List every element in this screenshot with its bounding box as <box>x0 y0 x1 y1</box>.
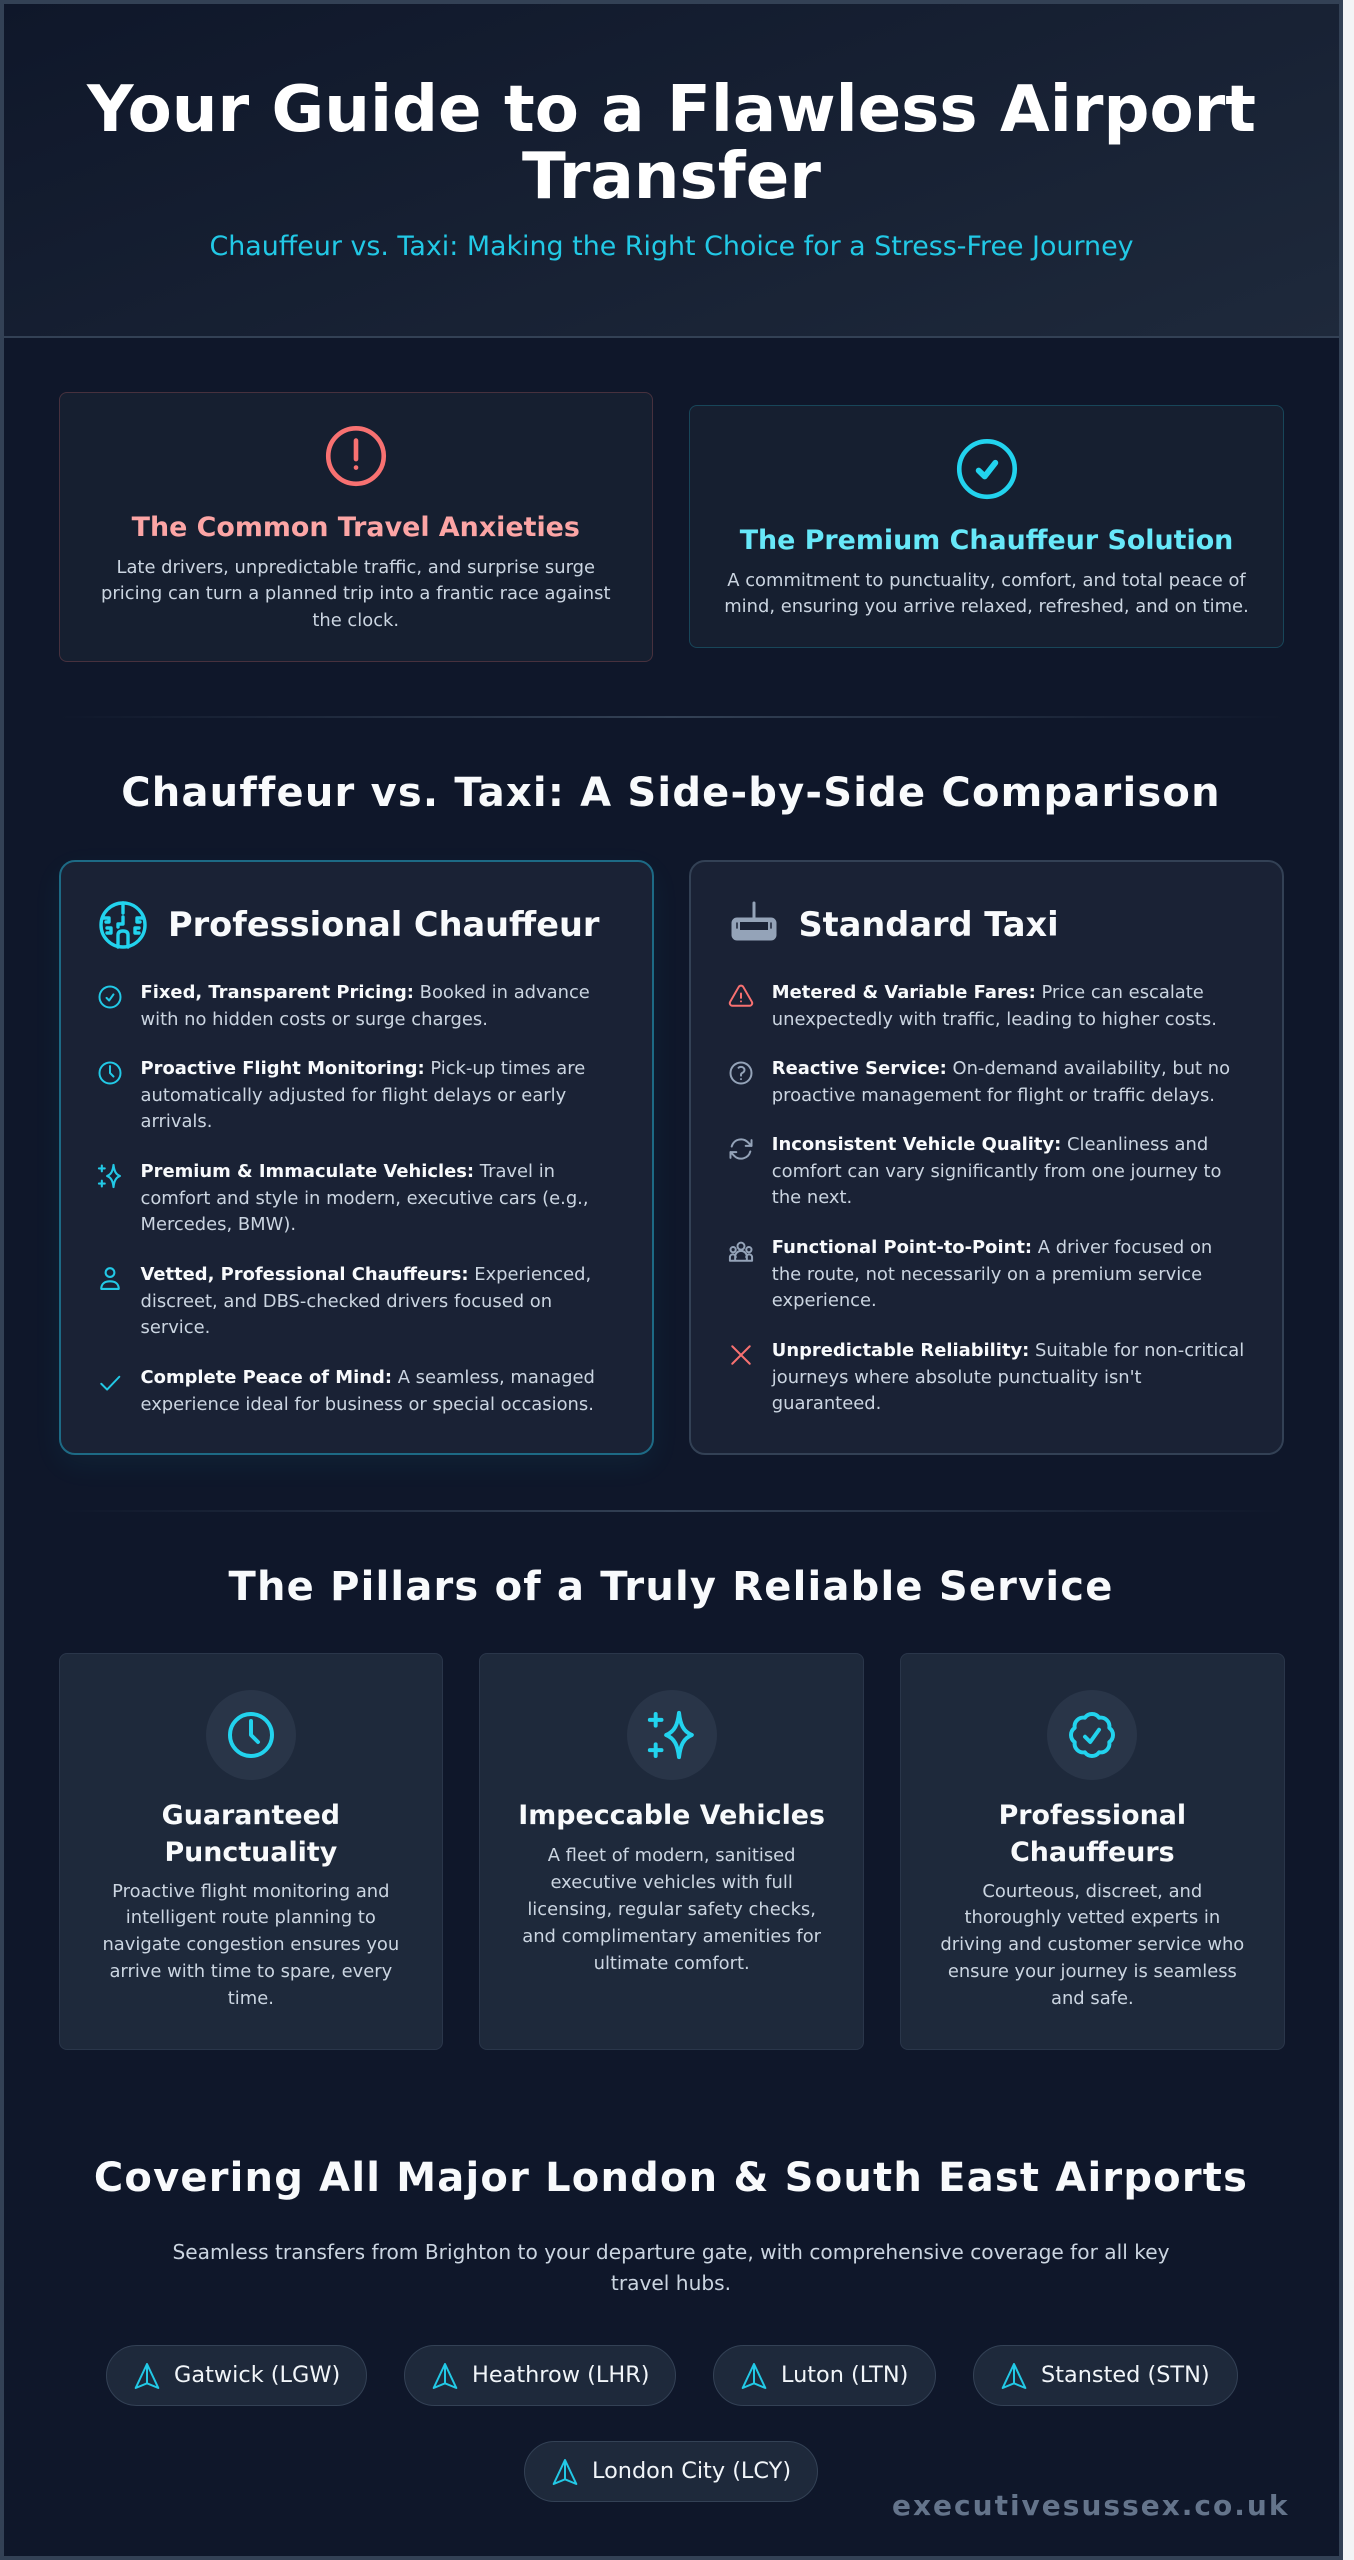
icon: refresh arrows <box>730 1138 752 1160</box>
text <box>140 982 590 1030</box>
list item: fares <box>728 982 1217 1030</box>
text <box>140 1367 595 1415</box>
pill: Stansted <box>973 2345 1238 2406</box>
panel: premium chauffeur solution <box>689 405 1284 648</box>
list item: reactive service <box>730 1058 1230 1106</box>
heading <box>162 1800 340 1868</box>
text: the clock. <box>312 610 399 631</box>
heading: Guaranteed <box>162 1800 340 1831</box>
text: Mercedes, BMW). <box>140 1214 296 1235</box>
panel: standard taxi <box>689 860 1284 1455</box>
section heading: airports: Covering All Major London & South East Airports <box>94 2155 1248 2201</box>
text: and complimentary amenities for <box>522 1926 821 1947</box>
text <box>102 1880 399 2009</box>
list item: flight monitoring <box>98 1058 585 1132</box>
text: comfort can vary significantly from one journey to <box>772 1161 1222 1182</box>
icon: user group <box>728 1242 754 1262</box>
text: the next. <box>772 1187 852 1208</box>
header banner <box>4 4 1339 338</box>
pill: London City <box>524 2441 818 2502</box>
text <box>522 1845 821 1974</box>
text: discreet, and DBS-checked drivers focused on <box>140 1291 552 1312</box>
text: automatically adjusted for flight delays or early <box>140 1085 566 1106</box>
panel: professional chauffeur <box>58 860 654 1455</box>
text: Unpredictable Reliability: Suitable for non-critical <box>772 1340 1244 1361</box>
heading <box>901 1798 1284 1871</box>
heading: The Common Travel Anxieties <box>132 512 580 543</box>
icon: sparkles <box>627 1690 717 1780</box>
text: thoroughly vetted experts in <box>964 1907 1220 1928</box>
text: experience. <box>772 1290 877 1311</box>
title <box>86 72 1256 214</box>
text <box>140 1058 585 1132</box>
panel: impeccable vehicles <box>479 1653 864 2050</box>
icon: clock <box>98 1062 122 1084</box>
heading: The Premium Chauffeur Solution <box>740 525 1233 556</box>
text: journeys where absolute punctuality isn't <box>772 1367 1142 1388</box>
section heading: pillars: The Pillars of a Truly Reliable Service <box>228 1564 1114 1610</box>
list item: vehicle quality <box>730 1134 1222 1208</box>
icon: plane <box>549 2456 581 2488</box>
icon: plane <box>429 2360 461 2392</box>
pill: Luton <box>713 2345 936 2406</box>
text: A fleet of modern, sanitised <box>548 1845 796 1866</box>
text <box>901 1878 1284 2013</box>
label: Luton (LTN) <box>781 2362 908 2388</box>
icon: user <box>100 1267 120 1290</box>
text: Functional Point-to-Point: A driver focused on <box>772 1237 1212 1258</box>
icon: plane <box>131 2360 163 2392</box>
text: experience ideal for business or special occasions. <box>140 1394 594 1415</box>
text: navigate congestion ensures you <box>102 1934 399 1955</box>
text: and safe. <box>1051 1988 1134 2009</box>
list item: point to point <box>728 1237 1212 1311</box>
text: airports intro: travel hubs. <box>611 2271 731 2295</box>
panel: common travel anxieties <box>58 392 653 662</box>
text <box>772 1237 1212 1311</box>
text: service. <box>140 1317 210 1338</box>
text: executive vehicles with full <box>550 1872 793 1893</box>
text <box>140 1264 591 1338</box>
text: Fixed, Transparent Pricing: Booked in advance <box>140 982 590 1003</box>
icon: check badge <box>1047 1690 1137 1780</box>
icon: exclamation circle <box>326 426 386 486</box>
text: ensure your journey is seamless <box>948 1961 1237 1982</box>
panel: guaranteed punctuality <box>58 1653 443 2050</box>
text <box>772 1134 1222 1208</box>
list item: chauffeurs <box>100 1264 591 1338</box>
text: driving and customer service who <box>940 1934 1244 1955</box>
heading: Impeccable Vehicles <box>518 1800 825 1831</box>
text <box>101 556 610 631</box>
heading: Standard Taxi <box>798 904 1059 944</box>
text: Metered & Variable Fares: Price can escalate <box>772 982 1204 1003</box>
list item: peace of mind <box>100 1367 595 1415</box>
list item: vehicles <box>98 1161 589 1235</box>
text: Premium & Immaculate Vehicles: Travel in <box>140 1161 555 1182</box>
text: Courteous, discreet, and <box>982 1880 1202 1902</box>
text: pricing can turn a planned trip into a frantic race against <box>101 583 610 604</box>
text <box>140 1161 589 1235</box>
text: Reactive Service: On-demand availability, but no <box>772 1058 1230 1079</box>
icon: check circle <box>98 986 122 1008</box>
label: Stansted (STN) <box>1041 2362 1210 2388</box>
icon: taxi <box>732 902 776 940</box>
text: time. <box>228 1988 274 2009</box>
icon: check <box>100 1376 120 1391</box>
text: Inconsistent Vehicle Quality: Cleanliness and <box>772 1134 1208 1155</box>
panel: professional chauffeurs <box>900 1653 1285 2050</box>
icon: sparkles <box>98 1164 121 1188</box>
icon: chauffeur wheel <box>99 901 147 949</box>
label: Heathrow (LHR) <box>472 2362 650 2388</box>
text: unexpectedly with traffic, leading to higher costs. <box>772 1009 1217 1030</box>
icon: cross <box>731 1345 751 1365</box>
icon: clock <box>206 1690 296 1780</box>
footer watermark: executivesussex.co.uk <box>892 2489 1289 2522</box>
text: arrive with time to spare, every <box>109 1961 392 1982</box>
pill: Heathrow <box>404 2345 676 2406</box>
text: arrivals. <box>140 1111 212 1132</box>
heading: Professional Chauffeur <box>168 904 599 944</box>
text: airports intro <box>0 2237 1342 2299</box>
icon: warning triangle <box>728 984 754 1007</box>
text: Late drivers, unpredictable traffic, and surprise surge <box>116 556 595 578</box>
text: with no hidden costs or surge charges. <box>140 1009 488 1030</box>
heading: Professional <box>999 1800 1186 1831</box>
icon: question circle <box>730 1062 752 1084</box>
subtitle: Chauffeur vs. Taxi: Making the Right Choice for a Stress-Free Journey <box>209 230 1134 262</box>
label: Gatwick (LGW) <box>174 2362 340 2388</box>
section heading: comparison: Chauffeur vs. Taxi: A Side-by-Side Comparison <box>121 770 1221 816</box>
title: Your Guide to a Flawless Airport <box>87 72 1256 147</box>
text <box>724 570 1249 617</box>
icon: plane <box>738 2360 770 2392</box>
title: Transfer <box>522 139 821 214</box>
list item: reliability <box>731 1340 1244 1414</box>
text: Proactive Flight Monitoring: Pick-up times are <box>140 1058 585 1079</box>
text: comfort and style in modern, executive cars (e.g., <box>140 1188 589 1209</box>
text: A commitment to punctuality, comfort, and total peace of <box>727 570 1246 590</box>
heading: Punctuality <box>164 1836 337 1868</box>
label: London City (LCY) <box>592 2458 791 2484</box>
text <box>771 1340 1244 1414</box>
pill: Gatwick <box>106 2345 367 2406</box>
text: Complete Peace of Mind: A seamless, managed <box>140 1367 595 1388</box>
heading: Chauffeurs <box>1010 1836 1175 1868</box>
list item: pricing <box>98 982 590 1030</box>
text: proactive management for flight or traffic delays. <box>772 1085 1215 1106</box>
text: guaranteed. <box>772 1393 881 1414</box>
text: mind, ensuring you arrive relaxed, refreshed, and on time. <box>724 596 1249 617</box>
icon: check circle <box>956 439 1018 500</box>
text: licensing, regular safety checks, <box>527 1899 816 1920</box>
icon: plane <box>998 2360 1030 2392</box>
text: the route, not necessarily on a premium service <box>772 1264 1202 1285</box>
text: airports intro: Seamless transfers from Brighton to your departure gate, with comprehensive coverage for all key <box>172 2240 1170 2264</box>
text: Proactive flight monitoring and <box>112 1880 390 1902</box>
text: ultimate comfort. <box>594 1953 750 1974</box>
text: intelligent route planning to <box>126 1907 376 1928</box>
text <box>772 1058 1230 1106</box>
text <box>772 982 1217 1030</box>
text: Vetted, Professional Chauffeurs: Experienced, <box>140 1264 591 1285</box>
